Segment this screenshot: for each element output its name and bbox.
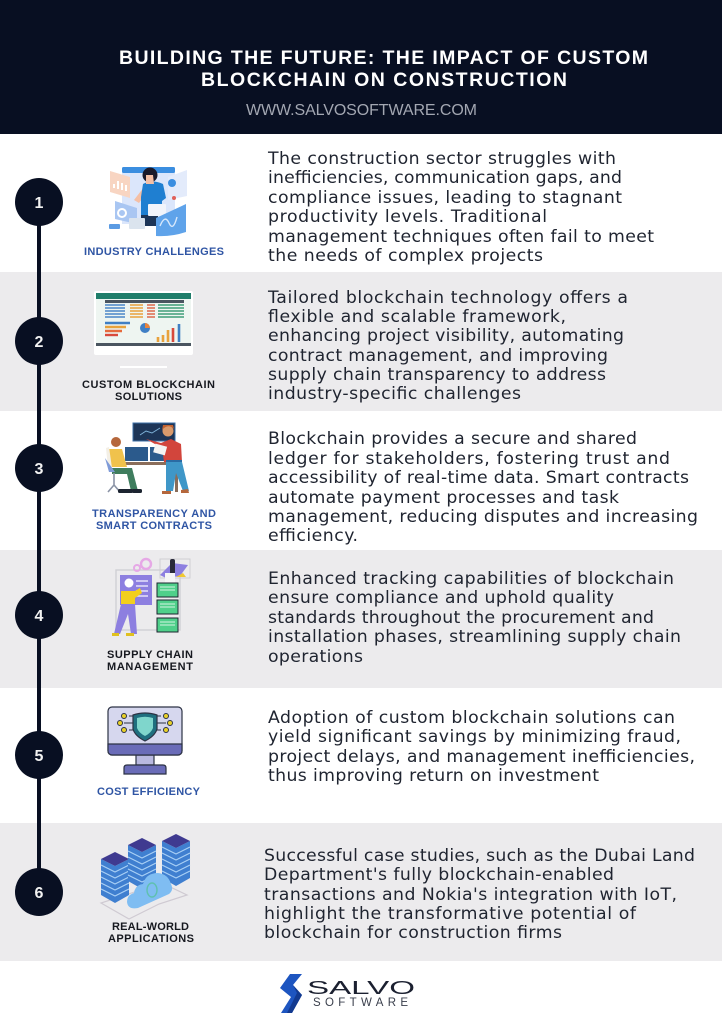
icon: supply chain worker and boxes [112, 559, 190, 636]
label: transparency and smart contracts: SMART CONTRACTS [96, 520, 212, 532]
label: cost efficiency: COST EFFICIENCY [97, 786, 201, 798]
logo: Salvo Software [280, 974, 415, 1013]
text: transparency and smart contracts: management, reducing disputes and increasing [268, 507, 698, 527]
header banner [0, 0, 722, 134]
text: custom blockchain solutions: enhancing project visibility, automating [268, 326, 624, 346]
text: cost efficiency: Adoption of custom blockchain solutions can [268, 708, 675, 728]
icon: spreadsheet monitor [94, 291, 193, 368]
icon: two people at monitors [105, 423, 189, 494]
text: transparency and smart contracts: automate payment processes and task [268, 488, 619, 508]
text: supply chain management: standards throughout the procurement and [268, 608, 654, 628]
text: cost efficiency: project delays, and management inefficiencies, [268, 747, 695, 767]
step 1 marker: 1 [35, 195, 44, 212]
label: custom blockchain solutions: CUSTOM BLOCKCHAIN [82, 379, 215, 391]
text: supply chain management: installation phases, streamlining supply chain [268, 627, 681, 647]
text: custom blockchain solutions [267, 288, 628, 404]
icon: person with data panels [109, 167, 187, 236]
server middle [128, 838, 156, 889]
step 6 marker: 6 [35, 885, 44, 902]
website url: WWW.SALVOSOFTWARE.COM [246, 102, 477, 119]
text: transparency and smart contracts: efficiency. [268, 526, 358, 546]
text: industry challenges: productivity levels. Traditional [268, 207, 547, 227]
text: industry challenges: management techniques often fail to meet [268, 227, 654, 247]
step 1 marker [15, 178, 63, 226]
text: supply chain management [268, 569, 681, 667]
label: custom blockchain solutions [82, 379, 215, 403]
label: real-world applications: APPLICATIONS [108, 933, 194, 945]
title: BLOCKCHAIN ON CONSTRUCTION [201, 69, 567, 91]
text: transparency and smart contracts: Blockchain provides a secure and shared [268, 429, 637, 449]
text: real-world applications: transactions and Nokia's integration with IoT, [264, 885, 677, 905]
step 4 marker [15, 591, 63, 639]
text: supply chain management: operations [268, 647, 363, 667]
text: transparency and smart contracts: ledger for stakeholders, fostering trust and [268, 449, 670, 469]
icon: servers and cloud [101, 834, 190, 919]
text: supply chain management: ensure compliance and uphold quality [268, 588, 614, 608]
step 3 marker [15, 444, 63, 492]
text: cost efficiency: yield significant savings by minimizing fraud, [268, 727, 681, 747]
text: real-world applications: Successful case studies, such as the Dubai Land [264, 846, 695, 866]
timeline [15, 178, 63, 916]
text: cost efficiency [268, 708, 695, 786]
label: real-world applications [108, 921, 194, 945]
label: custom blockchain solutions: SOLUTIONS [115, 391, 182, 403]
label: real-world applications: REAL-WORLD [112, 921, 189, 933]
label: supply chain management [107, 649, 193, 673]
text: industry challenges: The construction sector struggles with [267, 149, 616, 169]
text: custom blockchain solutions: supply chain transparency to address [268, 365, 606, 385]
text: industry challenges [267, 149, 654, 266]
label: supply chain management: SUPPLY CHAIN [107, 649, 193, 661]
step 5 marker: 5 [35, 748, 44, 765]
text: supply chain management: Enhanced tracking capabilities of blockchain [268, 569, 674, 589]
text: industry challenges: inefficiencies, communication gaps, and [268, 168, 622, 188]
text: transparency and smart contracts [268, 429, 698, 546]
text: real-world applications [264, 846, 695, 943]
label: industry challenges: INDUSTRY CHALLENGES [84, 246, 224, 258]
icon: monitor with shield [108, 707, 182, 774]
step 6 marker [15, 868, 63, 916]
text: transparency and smart contracts: accessibility of real-time data. Smart contracts [268, 468, 689, 488]
text: custom blockchain solutions: Tailored blockchain technology offers a [267, 288, 628, 308]
text: custom blockchain solutions: contract management, and improving [268, 346, 608, 366]
step 2 marker [15, 317, 63, 365]
icon: S mark [280, 974, 302, 1013]
label: transparency and smart contracts: TRANSPARENCY AND [92, 508, 216, 520]
text: real-world applications: blockchain for construction firms [264, 923, 562, 943]
label: supply chain management: MANAGEMENT [107, 661, 193, 673]
step 2 marker: 2 [35, 334, 44, 351]
step 3 marker: 3 [35, 461, 44, 478]
text: real-world applications: Department's fully blockchain-enabled [264, 865, 614, 885]
step 4 marker: 4 [35, 608, 44, 625]
title [119, 47, 648, 91]
text: real-world applications: highlight the transformative potential of [264, 904, 637, 924]
text: industry challenges: compliance issues, leading to stagnant [268, 188, 622, 208]
server right [162, 834, 190, 886]
text: custom blockchain solutions: flexible and scalable framework, [268, 307, 566, 327]
title: BUILDING THE FUTURE: THE IMPACT OF CUSTOM [119, 47, 648, 69]
wordmark: SALVO [307, 977, 415, 998]
server left [101, 852, 129, 903]
logo: Salvo Software: SOFTWARE [313, 997, 408, 1009]
text: cost efficiency: thus improving return on investment [268, 766, 599, 786]
label: transparency and smart contracts [92, 508, 216, 532]
text: custom blockchain solutions: industry-specific challenges [268, 384, 521, 404]
text: industry challenges: the needs of complex projects [268, 246, 543, 266]
step 5 marker [15, 731, 63, 779]
